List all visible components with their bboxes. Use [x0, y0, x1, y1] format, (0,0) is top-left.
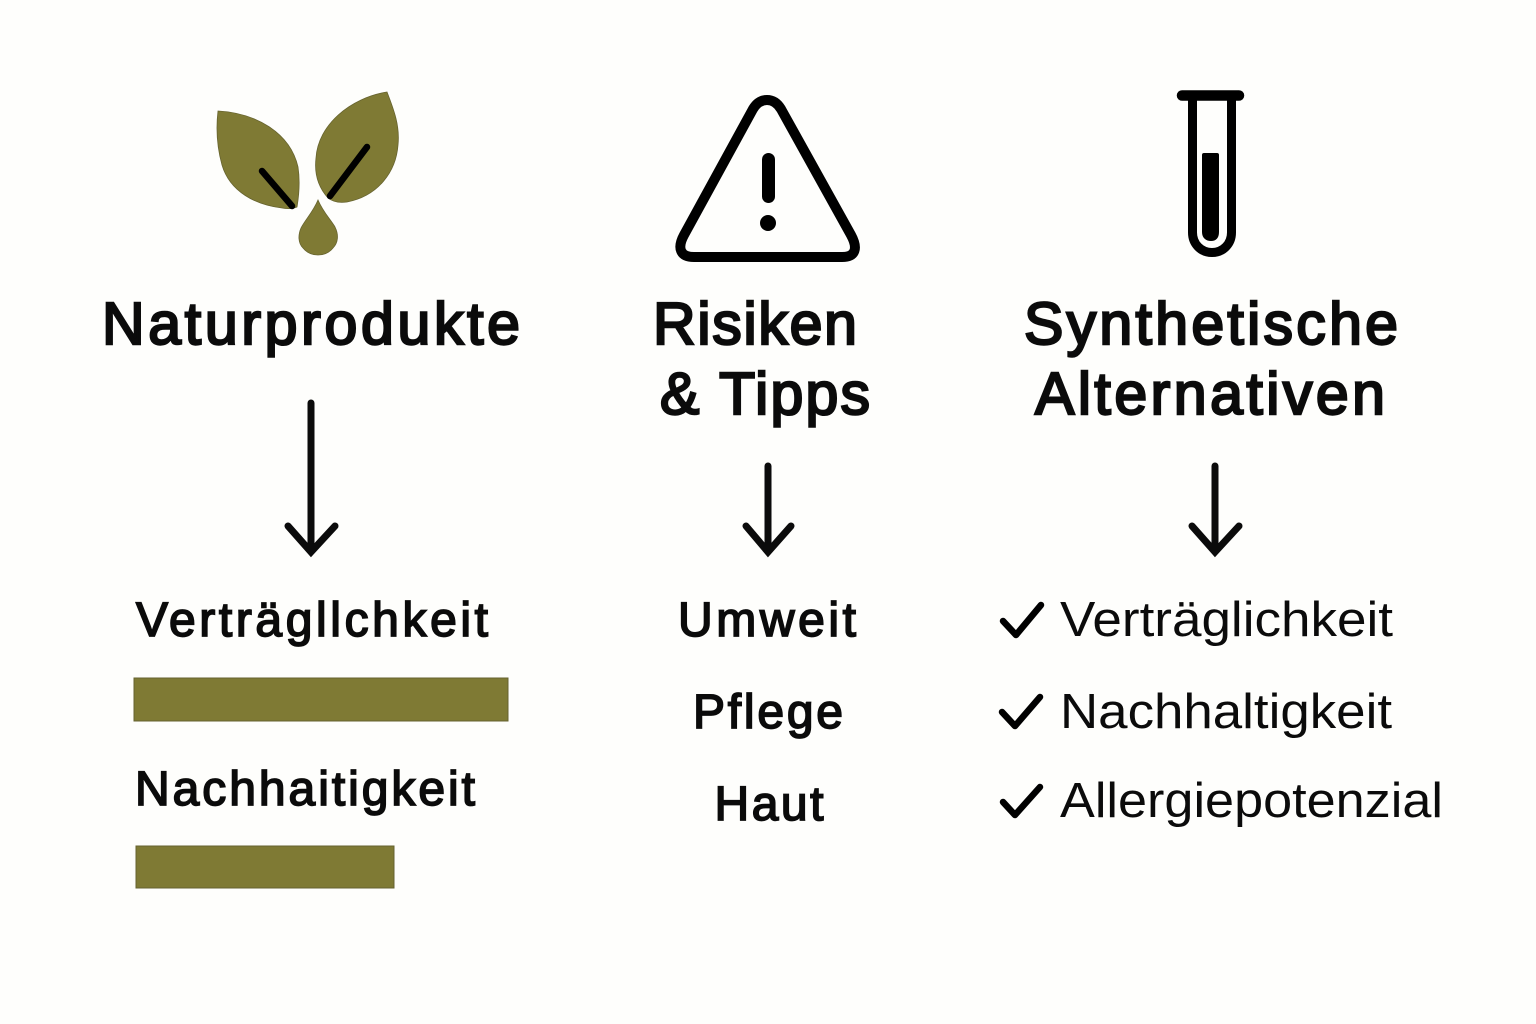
check item: Verträglichkeit: Verträglichkeit [1060, 593, 1393, 647]
heading: Synthetische Alternativen: Alternativen [1035, 361, 1385, 427]
arrow: Naturprodukte down [288, 403, 335, 552]
heading: Synthetische Alternativen: Synthetische [1024, 291, 1398, 357]
check item: Nachhaltigkeit: Nachhaltigkeit [1060, 685, 1392, 739]
check item: Allergiepotenzial: Allergiepotenzial [1060, 774, 1443, 828]
panel: Risiken & Tipps [653, 100, 870, 831]
heading: Synthetische Alternativen [1024, 291, 1398, 427]
label: Verträglichkeit: Verträgllchkeit [136, 594, 488, 647]
bar: Nachhaitigkeit [136, 846, 394, 888]
arrow: Synthetische down [1192, 466, 1239, 552]
panel: Naturprodukte [102, 92, 520, 888]
heading: Risiken & Tipps: Risiken [653, 291, 857, 357]
heading: Risiken & Tipps: & Tipps [660, 361, 870, 427]
panel: Synthetische Alternativen [1002, 95, 1443, 828]
icon: test tube [1182, 95, 1239, 252]
heading: Naturprodukte: Naturprodukte [102, 291, 520, 357]
label: Haut: Haut [714, 778, 824, 831]
icon: leaves with oil drop [217, 92, 398, 255]
arrow: Risiken down [746, 466, 791, 552]
icon: warning triangle [680, 100, 855, 257]
label: Nachhaitigkeit: Nachhaitigkeit [135, 763, 475, 816]
label: Pflege: Pflege [693, 686, 843, 739]
bar: Verträglichkeit [134, 678, 508, 721]
label: Umweit: Umweit [678, 594, 856, 647]
heading: Risiken & Tipps [653, 291, 870, 427]
